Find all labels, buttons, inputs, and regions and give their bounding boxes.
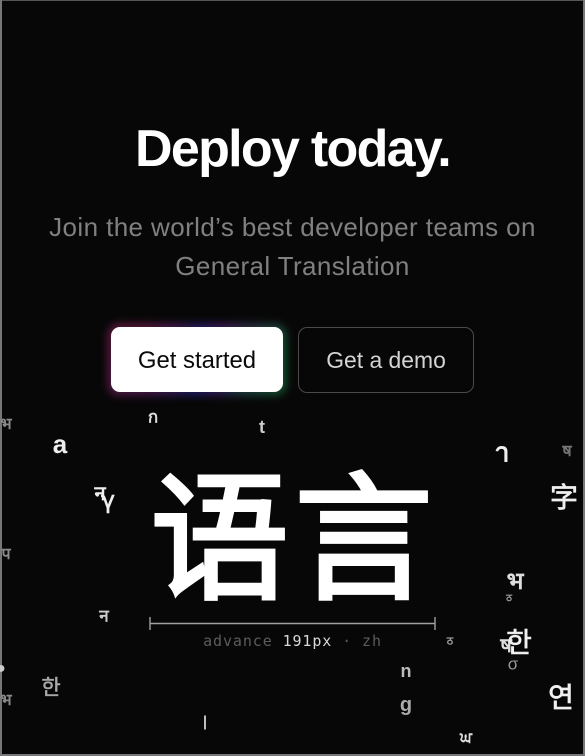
floating glyphs: g [400,694,412,716]
floating glyphs: ठ [447,634,453,648]
floating glyphs: ก [148,408,158,428]
floating glyphs: न [94,481,106,505]
floating glyphs: 연 [548,676,574,716]
floating glyphs: l [203,714,207,734]
button: Get started: Get started [138,347,256,374]
floating glyphs [0,408,578,747]
advance caption: advance 191px · zh [203,632,382,650]
floating glyphs: भ [0,690,12,709]
subtitle text: General Translation [175,251,410,281]
floating glyphs: न [99,606,109,626]
subtitle text: Join the world’s best developer teams on [49,212,536,242]
subtitle text [49,212,536,281]
floating glyphs: ठ [506,593,512,604]
floating glyphs: 字 [550,476,578,516]
floating glyphs: า [494,438,510,468]
floating glyphs: 한 [41,672,61,702]
large glyphs: language: 语言 [150,428,438,629]
button: Get a demo: Get a demo [326,347,446,373]
floating glyphs: भ [507,567,523,595]
floating glyphs: γ [101,486,115,514]
floating glyphs: t [259,417,265,437]
floating glyphs: ਘ [460,728,472,747]
floating glyphs: σ [508,654,518,674]
floating glyphs: n [400,661,412,681]
button: Get started [102,318,292,400]
floating glyphs: 한 [506,621,532,661]
floating glyphs: ष [562,441,572,460]
advance measure line [149,617,436,630]
title: Deploy today. [135,120,450,178]
floating glyphs: भ [0,414,12,433]
button: Get a demo [298,327,474,393]
floating glyphs: a [53,429,67,459]
floating glyphs: ष [500,633,512,657]
floating glyphs: प [1,544,11,563]
